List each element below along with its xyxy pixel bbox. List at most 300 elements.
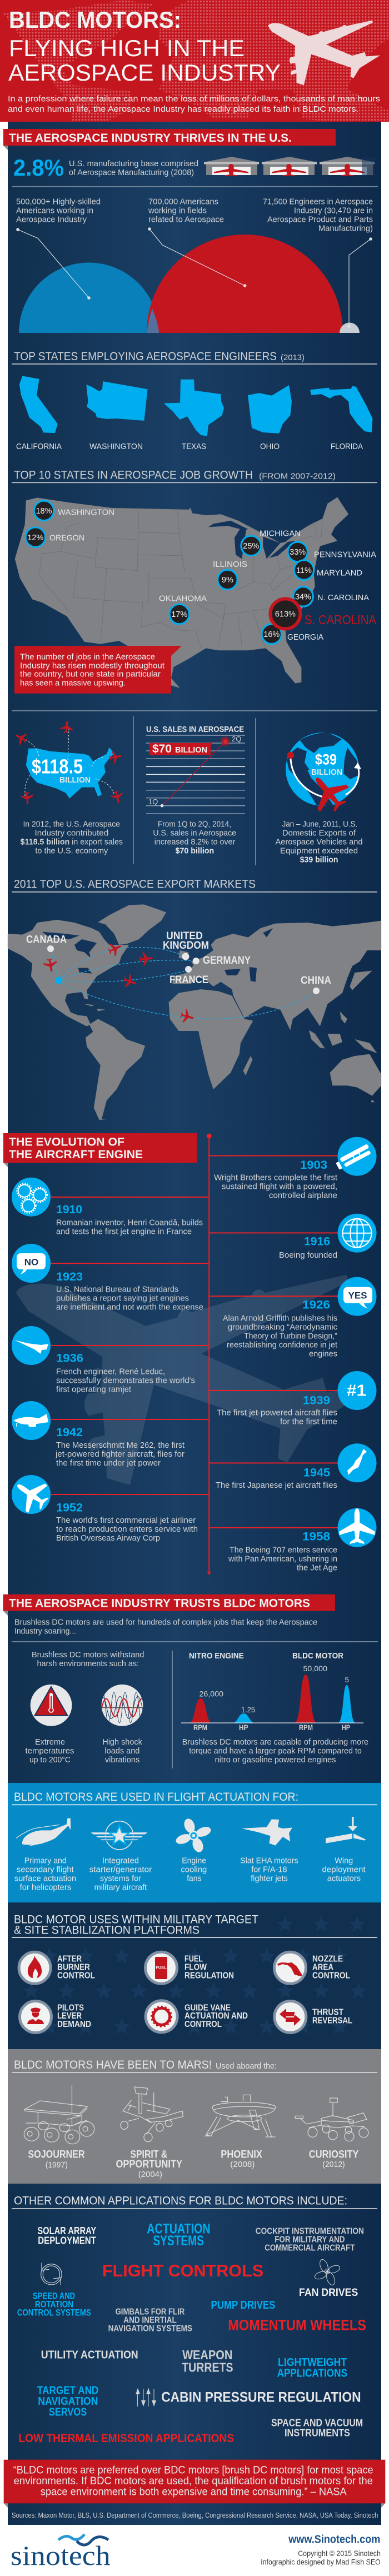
workforce text columns: 700,000 Americans xyxy=(148,197,218,206)
chart: U.S. sales line chart xyxy=(146,725,245,814)
intro text: and even human life, the Aerospace Industry has readily placed its faith in BLDC motors. xyxy=(8,104,358,114)
timeline 1936: successfully demonstrates the world's xyxy=(56,1376,195,1385)
route markers and planes xyxy=(43,940,320,1025)
rover labels: (2004) xyxy=(138,2170,162,2179)
text: domestic exports: Aerospace Vehicles and xyxy=(276,838,362,847)
captions: flight actuation: military aircraft xyxy=(94,1884,147,1892)
heading: top 10 states: TOP 10 STATES IN AEROSPACE JOB GROWTH xyxy=(14,469,253,481)
label: guide vane actuation xyxy=(184,2003,248,2029)
timeline 1926: Theory of Turbine Design,” xyxy=(244,1332,337,1341)
timeline 1916: Boeing founded xyxy=(279,1251,337,1260)
workforce text columns: 500,000+ Highly-skilled xyxy=(16,197,101,206)
title: AEROSPACE INDUSTRY xyxy=(8,59,281,86)
chart: nitro engine vs BLDC motor: 1.25 xyxy=(241,1706,255,1714)
text: sales growth: $70 billion xyxy=(176,847,214,856)
panel: military platforms xyxy=(8,1902,381,2049)
timeline 1952: The world's first commercial jet airliner xyxy=(56,1516,196,1525)
timeline 1945: The first Japanese jet aircraft flies xyxy=(216,1481,337,1490)
rover labels: SPIRIT & xyxy=(130,2149,168,2160)
state labels xyxy=(16,442,363,451)
job growth state labels: S. CAROLINA xyxy=(305,612,377,627)
icon: fighter jet xyxy=(242,1819,292,1846)
chart: U.S. sales line chart: U.S. SALES IN AEROSPACE xyxy=(146,725,244,734)
panel: Mars: BLDC MOTORS HAVE BEEN TO MARS! xyxy=(14,2059,212,2071)
heading: export markets: 2011 TOP U.S. AEROSPACE EXPORT MARKETS xyxy=(14,878,256,891)
market labels: KINGDOM xyxy=(163,940,209,951)
text: domestic exports: Equipment exceeded xyxy=(280,847,358,856)
word cloud: other applications: GIMBALS FOR FLIR xyxy=(116,2308,185,2317)
label: guide vane actuation: ACTUATION AND xyxy=(184,2011,248,2021)
section banner: industry trusts BLDC motors: THE AEROSPACE INDUSTRY TRUSTS BLDC MOTORS xyxy=(9,1597,310,1610)
text: domestic exports xyxy=(276,820,362,865)
icon: afterburner flame xyxy=(19,1952,51,1984)
stat: 2.8 percent: 2.8% xyxy=(13,155,64,181)
text: export sales: to the U.S. economy xyxy=(35,847,108,856)
callout: $70 billion: $70 xyxy=(152,743,172,755)
icon: cooling fan xyxy=(174,1817,212,1853)
chart: U.S. sales line chart: 2Q xyxy=(232,735,241,743)
captions: flight actuation: Engine xyxy=(182,1857,206,1866)
callout: NASA quote: space environment is both expensive and time consuming.” – NASA xyxy=(41,2486,347,2498)
timeline 1939 xyxy=(217,1371,377,1427)
captions: harsh environments: temperatures xyxy=(26,1747,74,1756)
timeline 1923 xyxy=(12,1244,203,1312)
state labels: TEXAS xyxy=(182,442,206,451)
workforce text columns: working in fields xyxy=(148,207,207,216)
job growth state labels: PENNSYLVANIA xyxy=(314,550,376,560)
timeline 1903 xyxy=(214,1137,377,1200)
callout: NASA quote xyxy=(4,2460,385,2508)
timeline 1923: NO xyxy=(24,1257,38,1268)
word cloud: other applications: UTILITY ACTUATION xyxy=(41,2349,138,2361)
text: harsh environments: harsh environments such as: xyxy=(37,1660,139,1668)
word cloud: other applications: DEPLOYMENT xyxy=(38,2235,96,2246)
rover labels: (2012) xyxy=(322,2160,345,2169)
label: fuel flow regulation: FLOW xyxy=(184,1962,207,1972)
job growth state labels: MICHIGAN xyxy=(260,529,301,539)
timeline 1916 xyxy=(279,1214,377,1260)
timeline 1926: 1926 xyxy=(302,1299,330,1312)
timeline 1910: and tests the first jet engine in France xyxy=(56,1228,192,1237)
word cloud: other applications: WEAPON xyxy=(182,2348,232,2362)
rover labels: CURIOSITY xyxy=(309,2149,359,2160)
header banner xyxy=(0,0,389,122)
watermark: large airplane xyxy=(16,1275,372,1485)
chart: nitro engine vs BLDC motor: 50,000 xyxy=(303,1665,327,1673)
workforce text columns: related to Aerospace xyxy=(148,216,224,225)
job growth state labels: OKLAHOMA xyxy=(159,594,207,603)
word cloud: other applications: ACTUATION xyxy=(147,2221,211,2236)
graphic: export sales map: BILLION xyxy=(59,776,91,785)
footer credits: Copyright © 2015 Sinotech xyxy=(298,2549,381,2558)
text: torque and RPM xyxy=(182,1738,368,1765)
rover labels: (2008) xyxy=(230,2160,255,2169)
text: domestic exports: Domestic Exports of xyxy=(282,829,356,838)
label: after burner control: BURNER xyxy=(57,1962,90,1972)
text: export sales xyxy=(21,820,123,856)
text: sales growth xyxy=(153,820,236,856)
word cloud: other applications: FLIGHT CONTROLS xyxy=(102,2261,263,2280)
captions: flight actuation: actuators xyxy=(327,1875,361,1884)
job growth bubbles: 34% xyxy=(295,592,311,601)
chart: nitro engine vs BLDC motor: HP xyxy=(342,1723,350,1732)
timeline 1926: reestablishing confidence in jet xyxy=(227,1341,337,1349)
captions: harsh environments: up to 200°C xyxy=(29,1756,71,1765)
icon: extreme temperature xyxy=(31,1685,72,1726)
state shapes xyxy=(19,376,372,436)
captions: flight actuation: starter/generator xyxy=(89,1866,152,1875)
chart: nitro engine vs BLDC motor: 5 xyxy=(345,1676,349,1684)
section banner: aerospace industry thrives: THE AEROSPACE INDUSTRY THRIVES IN THE U.S. xyxy=(9,132,292,145)
label: thrust reversal xyxy=(312,2008,352,2026)
timeline 1926: groundbreaking “Aerodynamic xyxy=(228,1323,337,1332)
panel: military platforms: & SITE STABILIZATION PLATFORMS xyxy=(14,1924,200,1936)
timeline 1942 xyxy=(12,1401,184,1468)
timeline 1958 xyxy=(228,1508,377,1572)
word cloud: other applications: LOW THERMAL EMISSION APPLICATIONS xyxy=(19,2432,234,2445)
word cloud: other applications: NAVIGATION SYSTEMS xyxy=(108,2324,192,2334)
text: sales growth: U.S. sales in Aerospace xyxy=(153,829,236,838)
label: nozzle area control xyxy=(312,1954,350,1980)
workforce text columns: Manufacturing) xyxy=(318,225,373,233)
icon: fan outline xyxy=(314,2259,341,2286)
captions: flight actuation: Integrated xyxy=(102,1857,139,1866)
graphic: globe with $39 billion xyxy=(286,733,361,819)
icon: Sojourner rover xyxy=(24,2085,94,2144)
map: United States xyxy=(15,497,348,688)
captions: harsh environments xyxy=(26,1738,143,1765)
icon: wing deployment xyxy=(326,1817,366,1843)
job growth bubbles: 11% xyxy=(296,566,312,575)
workforce text columns: 71,500 Engineers in Aerospace xyxy=(263,197,373,206)
job growth state labels: WASHINGTON xyxy=(58,507,114,517)
label: fuel flow regulation: REGULATION xyxy=(184,1971,234,1980)
word cloud: other applications: COCKPIT INSTRUMENTATION xyxy=(256,2226,364,2236)
job growth bubbles: 12% xyxy=(27,534,43,542)
intro: brushless DC motors xyxy=(14,1618,317,1636)
label: pilots lever demand: PILOTS xyxy=(57,2003,84,2012)
timeline 1903: 1903 xyxy=(300,1159,327,1172)
market labels: UNITED xyxy=(166,930,203,942)
captions: flight actuation: for helicopters xyxy=(20,1884,71,1892)
heading: top 10 states xyxy=(12,469,377,483)
timeline 1936: first operating ramjet xyxy=(56,1385,131,1394)
word cloud: other applications: ROTATION xyxy=(35,2300,73,2310)
word cloud: other applications: FAN DRIVES xyxy=(299,2287,358,2299)
timeline 1942: jet-powered fighter aircraft, flies for xyxy=(55,1450,184,1459)
job growth bubbles: 33% xyxy=(290,548,306,557)
captions: flight actuation: fans xyxy=(187,1875,201,1884)
job growth bubbles: 16% xyxy=(263,630,280,639)
callout: $70 billion xyxy=(149,741,213,755)
word cloud: other applications: LIGHTWEIGHT xyxy=(278,2356,347,2369)
word cloud: other applications: MOMENTUM WHEELS xyxy=(228,2316,366,2333)
section banner: evolution of the aircraft engine: THE AIRCRAFT ENGINE xyxy=(9,1148,143,1161)
timeline 1903: sustained flight with a powered, xyxy=(222,1182,337,1191)
callout: NASA quote: “BLDC motors are preferred over BDC motors [brush DC motors] for most space xyxy=(13,2465,373,2477)
icon: fuel barrel: FUEL xyxy=(156,1965,167,1970)
job growth state labels: OREGON xyxy=(49,534,84,543)
rover labels xyxy=(28,2149,359,2179)
timeline 1926: YES xyxy=(348,1291,367,1301)
stat: 2.8 percent: of Aerospace Manufacturing (2008) xyxy=(69,168,194,177)
word cloud: other applications: TARGET AND xyxy=(37,2385,98,2397)
icon: helicopter xyxy=(16,1818,71,1846)
icon: Phoenix lander xyxy=(205,2095,276,2137)
captions: flight actuation: Slat EHA motors xyxy=(240,1857,298,1866)
timeline 1939: The first jet-powered aircraft flies xyxy=(217,1409,337,1418)
panel: Mars: Used aboard the: xyxy=(216,2061,277,2071)
graphic: export sales map xyxy=(13,720,124,805)
timeline 1936: 1936 xyxy=(56,1352,83,1365)
timeline 1952: 1952 xyxy=(56,1501,83,1514)
section banner: aerospace industry thrives xyxy=(3,129,336,150)
timeline 1926 xyxy=(223,1277,377,1358)
icon: thrust reversal arrows xyxy=(275,2001,306,2033)
text: torque and RPM: torque and have a larger peak RPM compared to xyxy=(189,1747,362,1756)
word cloud: other applications: SERVOS xyxy=(49,2406,87,2418)
logo: sinotech: sinotech xyxy=(11,2540,111,2571)
timeline 1926: engines xyxy=(309,1349,337,1358)
panel: military platforms: BLDC MOTOR USES WITHIN MILITARY TARGET xyxy=(14,1913,258,1926)
timeline 1952 xyxy=(8,1471,198,1543)
label: after burner control: AFTER xyxy=(57,1954,82,1964)
captions: harsh environments: loads and xyxy=(104,1747,139,1756)
label: pilots lever demand: LEVER xyxy=(57,2011,82,2021)
text: torque and RPM: Brushless DC motors are capable of producing more xyxy=(182,1738,368,1747)
captions: flight actuation xyxy=(14,1857,366,1892)
label: after burner control: CONTROL xyxy=(57,1971,95,1980)
section banner: industry trusts BLDC motors xyxy=(3,1595,335,1616)
rover labels: PHOENIX xyxy=(221,2149,262,2160)
timeline 1958: The Boeing 707 enters service xyxy=(230,1546,337,1554)
rover labels: OPPORTUNITY xyxy=(116,2159,182,2170)
job growth bubbles: 18% xyxy=(36,507,52,516)
job growth state labels: GEORGIA xyxy=(287,632,323,642)
text: harsh environments: Brushless DC motors withstand xyxy=(32,1651,144,1660)
workforce text columns: Industry (30,470 are in xyxy=(294,207,373,216)
callout: massive upswing: Industry has risen modestly throughout xyxy=(20,661,164,670)
graphic: globe with $39 billion: $39 xyxy=(315,751,337,768)
chart: U.S. sales line chart: 1Q xyxy=(148,798,158,806)
job growth state labels: MARYLAND xyxy=(317,568,362,578)
graphic: export sales map: $118.5 xyxy=(32,755,83,778)
panel: Mars xyxy=(8,2049,381,2184)
word cloud: other applications: AND INERTIAL xyxy=(123,2316,177,2325)
chart: proportional half circles xyxy=(16,227,372,333)
label: guide vane actuation: GUIDE VANE xyxy=(184,2003,231,2012)
word cloud: other applications: SYSTEMS xyxy=(153,2233,204,2249)
timeline 1936 xyxy=(12,1326,195,1394)
icon: Curiosity rover xyxy=(295,2098,368,2141)
chart: nitro engine vs BLDC motor: BLDC MOTOR xyxy=(292,1652,343,1661)
text: export sales: $118.5 billion in export sales xyxy=(21,838,123,847)
chart: nitro engine vs BLDC motor: 26,000 xyxy=(199,1690,223,1698)
intro: brushless DC motors: Brushless DC motors are used for hundreds of complex jobs that keep the Aerospace xyxy=(14,1618,317,1627)
workforce text columns: Aerospace Product and Parts xyxy=(267,216,373,225)
section banner: evolution of the aircraft engine: THE EVOLUTION OF xyxy=(9,1136,124,1149)
label: after burner control xyxy=(57,1954,95,1980)
timeline 1926: Alan Arnold Griffith publishes his xyxy=(223,1314,337,1323)
intro: brushless DC motors: Industry soaring... xyxy=(14,1627,76,1636)
timeline 1958: the Jet Age xyxy=(297,1563,337,1572)
chart: nitro engine vs BLDC motor: RPM xyxy=(193,1723,207,1732)
chart: nitro engine vs BLDC motor: HP xyxy=(239,1723,248,1732)
timeline 1945: 1945 xyxy=(303,1467,330,1479)
stat: 2.8 percent: U.S. manufacturing base comprised xyxy=(69,160,198,168)
chart: nitro engine vs BLDC motor xyxy=(181,1652,363,1732)
heading: top states: (2013) xyxy=(281,353,305,362)
timeline 1910 xyxy=(12,1178,203,1237)
timeline 1942: The Messerschmitt Me 262, the first xyxy=(56,1441,184,1450)
label: guide vane actuation: CONTROL xyxy=(184,2020,222,2029)
timeline 1903: Wright Brothers complete the first xyxy=(214,1173,337,1182)
icon: hangars xyxy=(204,157,375,176)
market labels xyxy=(26,930,331,986)
timeline 1916: 1916 xyxy=(304,1235,330,1248)
label: nozzle area control: NOZZLE xyxy=(312,1954,343,1964)
word cloud: other applications: COMMERCIAL AIRCRAFT xyxy=(265,2243,355,2253)
workforce text columns: Americans working in xyxy=(16,207,93,216)
text: sales growth: From 1Q to 2Q, 2014, xyxy=(158,820,231,829)
text: domestic exports: Jan – June, 2011, U.S. xyxy=(282,820,357,829)
label: nozzle area control: AREA xyxy=(312,1962,333,1972)
icon: pilot xyxy=(20,2001,51,2033)
stat: 2.8 percent xyxy=(13,155,198,181)
captions: flight actuation: for F/A-18 xyxy=(251,1866,287,1875)
word cloud: other applications: PUMP DRIVES xyxy=(211,2299,276,2311)
job growth state labels xyxy=(49,507,377,642)
heading: top states: TOP STATES EMPLOYING AEROSPACE ENGINEERS xyxy=(14,350,277,363)
word cloud: other applications: INSTRUMENTS xyxy=(285,2427,350,2438)
market labels: GERMANY xyxy=(203,955,251,966)
state labels: CALIFORNIA xyxy=(16,442,62,451)
label: thrust reversal: THRUST xyxy=(312,2008,343,2017)
captions: flight actuation: secondary flight xyxy=(17,1866,74,1875)
workforce text columns: Aerospace Industry xyxy=(16,216,87,225)
timeline 1952: to reach production enters service with xyxy=(56,1525,198,1534)
word cloud: other applications: FOR MILITARY AND xyxy=(275,2235,345,2244)
icon: Spirit rover xyxy=(121,2087,183,2142)
heading: top 10 states: (FROM 2007-2012) xyxy=(259,471,336,481)
timeline 1958: 1958 xyxy=(302,1531,330,1543)
state labels: FLORIDA xyxy=(331,442,363,451)
job growth bubbles xyxy=(26,501,314,644)
timeline 1952: British Overseas Airway Corp xyxy=(56,1534,160,1543)
captions: flight actuation: systems for xyxy=(100,1875,141,1884)
icon: rotation xyxy=(41,2263,62,2285)
text: export sales: In 2012, the U.S. Aerospace xyxy=(23,820,120,829)
job growth state labels: ILLINOIS xyxy=(213,560,247,569)
captions: flight actuation: Wing xyxy=(335,1857,353,1866)
icon: fuel barrel xyxy=(146,1952,177,1984)
label: thrust reversal: REVERSAL xyxy=(312,2016,352,2026)
word cloud: other applications: NAVIGATION xyxy=(38,2395,98,2408)
job growth state labels: N. CAROLINA xyxy=(317,593,369,602)
captions: flight actuation: deployment xyxy=(322,1866,366,1875)
footer credits xyxy=(261,2534,381,2566)
timeline 1923: 1923 xyxy=(56,1270,83,1283)
timeline axis xyxy=(51,1134,338,1575)
word cloud: other applications: TURRETS xyxy=(182,2360,233,2374)
callout: massive upswing: The number of jobs in the Aerospace xyxy=(20,652,155,661)
panel: flight actuation: BLDC MOTORS ARE USED IN FLIGHT ACTUATION FOR: xyxy=(14,1791,298,1803)
job growth bubbles: 9% xyxy=(222,576,233,585)
graphic: globe with $39 billion: BILLION xyxy=(311,768,342,777)
rover labels: (1997) xyxy=(46,2160,68,2170)
word cloud: other applications: SPEED AND xyxy=(33,2291,75,2301)
captions: flight actuation: surface actuation xyxy=(14,1875,76,1884)
word cloud: other applications: APPLICATIONS xyxy=(277,2367,347,2379)
job growth bubbles: 25% xyxy=(243,542,259,551)
label: nozzle area control: CONTROL xyxy=(312,1971,350,1980)
icon: guide vane gear xyxy=(146,2001,177,2032)
job growth bubbles: 17% xyxy=(171,610,187,619)
timeline 1910: 1910 xyxy=(56,1203,82,1216)
word cloud: other applications xyxy=(17,2221,366,2445)
callout: NASA quote: environments. If BDC motors are used, the qualification of brush motors for the xyxy=(14,2475,373,2487)
chart: nitro engine vs BLDC motor: NITRO ENGINE xyxy=(189,1652,244,1661)
text: sales growth: increased 8.2% to over xyxy=(154,838,235,847)
title xyxy=(8,7,281,86)
icon: vibration xyxy=(101,1684,143,1726)
intro text xyxy=(8,94,380,114)
timeline 1942: 1942 xyxy=(56,1426,83,1439)
label: pilots lever demand: DEMAND xyxy=(57,2020,91,2029)
chart: nitro engine vs BLDC motor: RPM xyxy=(299,1723,313,1732)
captions: flight actuation: cooling xyxy=(181,1866,207,1875)
word cloud: other applications: CONTROL SYSTEMS xyxy=(17,2308,91,2318)
timeline 1945 xyxy=(216,1443,377,1490)
map: world xyxy=(8,904,381,1120)
text: torque and RPM: nitro or gasoline powered engines xyxy=(215,1756,336,1765)
captions: flight actuation: fighter jets xyxy=(251,1875,288,1884)
timeline 1923: U.S. National Bureau of Standards xyxy=(56,1285,178,1294)
title: BLDC MOTORS: xyxy=(9,7,181,33)
icon: star and wings xyxy=(90,1821,148,1850)
timeline 1936: French engineer, René Leduc, xyxy=(56,1367,165,1376)
panel: flight actuation xyxy=(8,1783,381,1902)
timeline 1903: controlled airplane xyxy=(269,1191,337,1200)
word cloud: other applications: SOLAR ARRAY xyxy=(37,2225,96,2236)
callout: massive upswing: the country, but one state in particular xyxy=(20,670,161,679)
timeline 1939: 1939 xyxy=(303,1394,330,1407)
icon: fuel nozzle xyxy=(275,1952,306,1984)
flight routes xyxy=(51,948,314,1019)
timeline 1939: #1 xyxy=(347,1382,366,1400)
title: FLYING HIGH IN THE xyxy=(9,35,245,61)
intro text: In a profession where failure can mean the loss of millions of dollars, thousands of man hours xyxy=(8,94,380,103)
market labels: FRANCE xyxy=(169,974,208,986)
workforce text columns xyxy=(16,197,373,233)
state labels: OHIO xyxy=(260,442,280,451)
market labels: CHINA xyxy=(301,975,331,986)
icon: header airplane xyxy=(268,21,380,85)
timeline 1942: the first time under jet power xyxy=(56,1459,161,1468)
icon: pressure arrows xyxy=(136,2388,156,2406)
label: fuel flow regulation: FUEL xyxy=(184,1954,203,1964)
text: domestic exports: $39 billion xyxy=(300,856,338,865)
label: fuel flow regulation xyxy=(184,1954,234,1980)
label: pilots lever demand xyxy=(57,2003,91,2029)
captions: harsh environments: vibrations xyxy=(105,1756,139,1765)
word cloud: other applications: CABIN PRESSURE REGULATION xyxy=(161,2390,361,2405)
heading: other applications: OTHER COMMON APPLICATIONS FOR BLDC MOTORS INCLUDE: xyxy=(14,2195,347,2208)
callout: $70 billion: BILLION xyxy=(175,745,207,755)
callout: massive upswing xyxy=(14,646,182,694)
text: harsh environments xyxy=(32,1651,144,1668)
timeline 1958: with Pan American, ushering in xyxy=(228,1554,337,1563)
